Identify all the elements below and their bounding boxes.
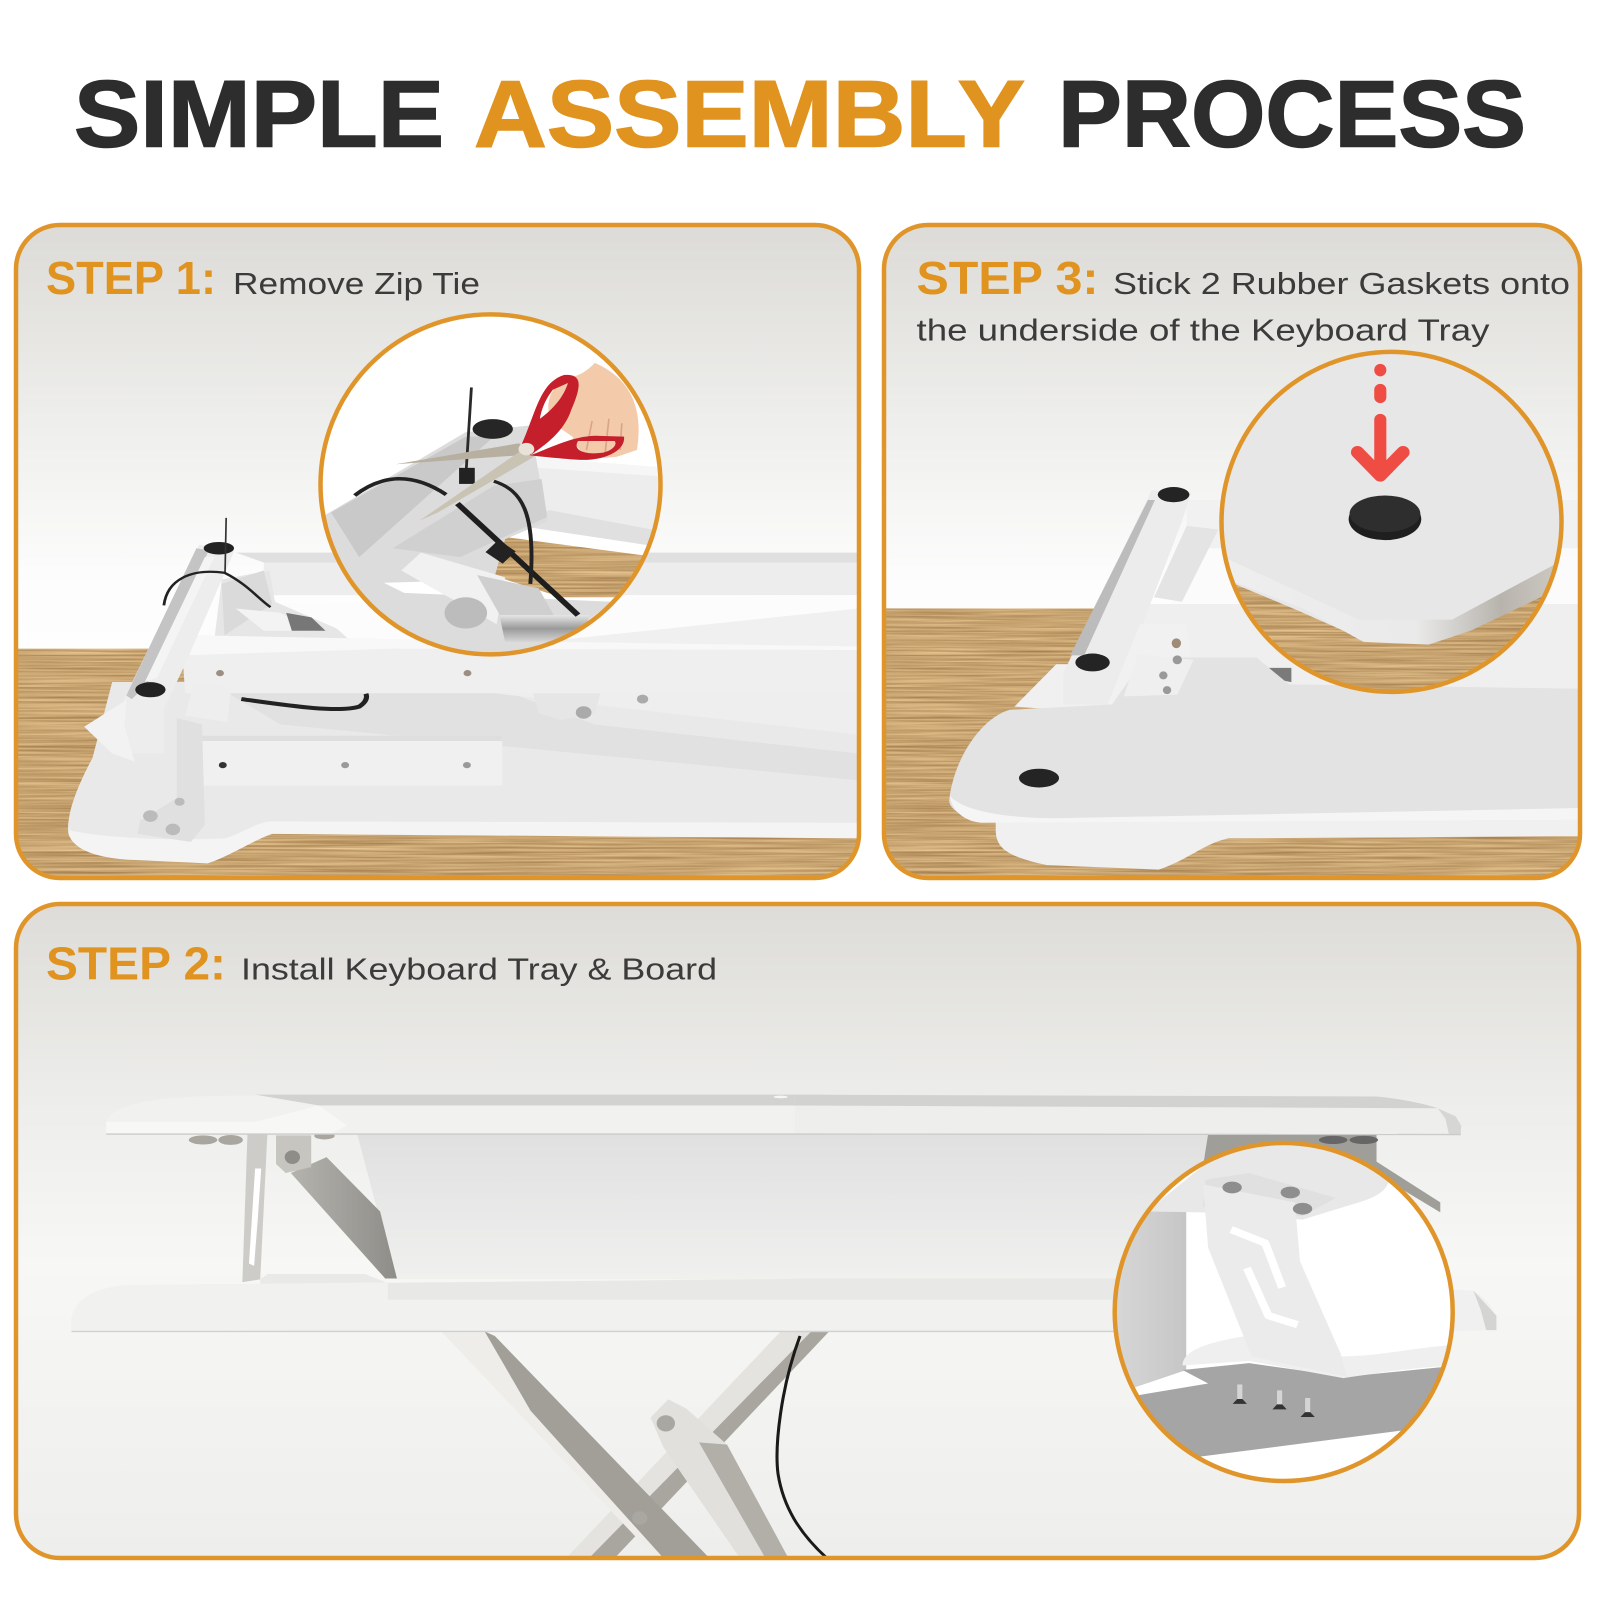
back panel continuation	[826, 1135, 1208, 1268]
step 3 heading: the underside of the Keyboard Tray	[916, 312, 1490, 348]
lower base	[996, 818, 1578, 870]
back tray piece	[1014, 664, 1112, 713]
step 3 heading	[916, 252, 1570, 348]
frame column	[1063, 490, 1191, 704]
red arrow	[1357, 364, 1403, 475]
mechanism and bolt	[401, 553, 589, 642]
left side panel	[1106, 1202, 1186, 1397]
bolts	[1222, 1182, 1312, 1215]
top board right	[795, 1095, 1461, 1135]
panel: step 1 remove zip tie	[0, 225, 898, 903]
rubber gasket large	[1349, 496, 1421, 540]
screws	[1233, 1384, 1315, 1417]
scissor legs	[441, 1331, 829, 1558]
rubber feet and zip tie	[135, 518, 270, 697]
step 2 heading: STEP 2:	[46, 938, 226, 990]
power cable	[241, 694, 367, 709]
scissor arm	[499, 694, 648, 719]
front beam	[182, 635, 859, 693]
tray gray underside	[1127, 1363, 1458, 1457]
panel: step 3 rubber gaskets	[870, 225, 1600, 903]
frame feet	[1075, 487, 1189, 671]
step 2 heading: Install Keyboard Tray & Board	[241, 952, 717, 986]
inset circle: gasket close-up	[1222, 352, 1568, 700]
top board left	[106, 1095, 829, 1134]
lower bracket	[202, 736, 502, 768]
base board	[68, 682, 859, 863]
L bracket	[137, 683, 231, 842]
title: PROCESS	[1058, 62, 1526, 168]
L bracket plate	[1203, 1184, 1347, 1377]
top mounting plate	[1147, 1135, 1389, 1220]
lower tray left	[71, 1274, 829, 1331]
wood under tray	[1236, 584, 1542, 690]
step 3 heading: STEP 3:	[916, 252, 1098, 304]
inset circle: cutting the zip tie	[314, 314, 668, 664]
inset circle: bracket and screws	[1106, 1135, 1458, 1481]
rear frame bar	[236, 552, 857, 646]
step 1 heading: Remove Zip Tie	[233, 266, 480, 301]
rubber foot	[473, 419, 513, 439]
wood behind mechanism	[495, 538, 642, 598]
step 1 heading: STEP 1:	[46, 252, 216, 304]
rear frame	[1142, 526, 1578, 689]
scissors	[396, 375, 624, 521]
title: SIMPLE	[74, 62, 444, 168]
step 2 heading	[46, 938, 717, 990]
back panel	[358, 1135, 795, 1268]
zip tie	[355, 387, 578, 615]
panel: step 2 install keyboard tray and board	[16, 904, 1579, 1560]
frame bars	[326, 426, 658, 652]
mechanism behind beam	[215, 574, 348, 638]
left frame column	[84, 545, 325, 762]
step 1 heading	[46, 252, 480, 304]
power cable	[777, 1336, 829, 1560]
white tray rim	[1183, 1336, 1453, 1378]
left brackets	[189, 1132, 397, 1282]
tray edge	[1341, 565, 1554, 645]
title: ASSEMBLY	[474, 62, 1025, 168]
title	[74, 62, 1526, 168]
lower tray right	[795, 1279, 1496, 1331]
rear right bracket	[1203, 1134, 1440, 1212]
keyboard tray	[949, 638, 1582, 823]
step 3 heading: Stick 2 Rubber Gaskets onto	[1113, 266, 1570, 301]
rubber gasket small	[1019, 769, 1059, 787]
hand	[548, 363, 639, 458]
